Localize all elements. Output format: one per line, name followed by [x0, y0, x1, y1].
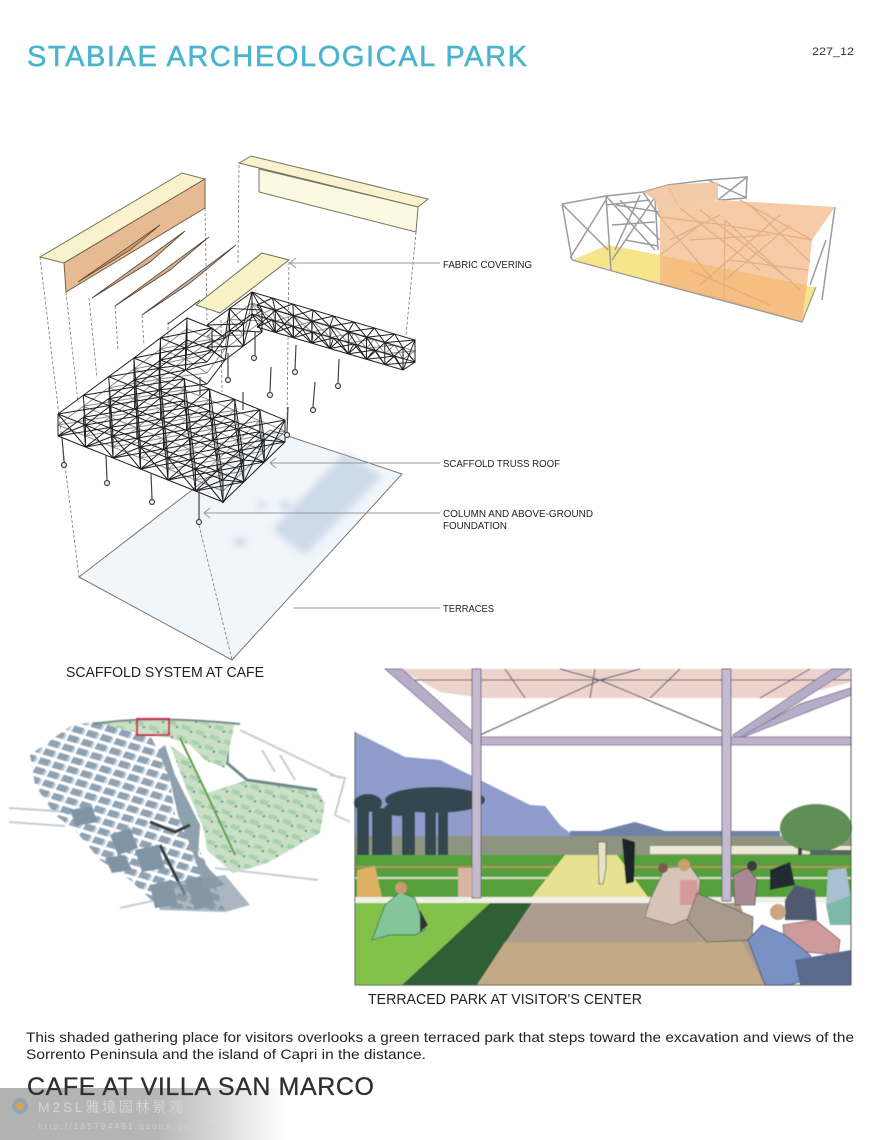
- people on bench: [645, 859, 700, 925]
- seated cafe group: [733, 861, 851, 985]
- label: column and foundation: COLUMN AND ABOVE-GROUND: [443, 509, 593, 520]
- park teal edge and tree row: [227, 725, 317, 790]
- fabric panel: center: [196, 253, 289, 313]
- sketch: terraced park at visitor's center: [354, 669, 852, 985]
- site model of city and park: [9, 719, 350, 912]
- horizontal beam: [473, 737, 851, 745]
- standing people: [598, 838, 635, 884]
- distant water and hills: [570, 822, 780, 838]
- label: column and foundation: [443, 509, 593, 532]
- watermark url: http://185794491.qzone.qq.com: [38, 1121, 215, 1131]
- fabric panel: left: [40, 173, 236, 324]
- floor edge: [572, 260, 816, 322]
- roof thin lines: [415, 669, 851, 735]
- mountain: [355, 732, 570, 845]
- columns and foundations: [62, 332, 340, 524]
- dark central feature: [150, 822, 190, 895]
- concrete floor: [477, 903, 765, 985]
- central yellow path: [532, 855, 648, 897]
- watermark icon: [12, 1098, 28, 1114]
- watermark name: M2SL雅境园林景观: [38, 1099, 183, 1115]
- foreground white ledge: [355, 897, 851, 903]
- 3D massing view of fabric on truss: [562, 177, 835, 322]
- body text: [26, 1029, 854, 1062]
- label: scaffold truss roof: SCAFFOLD TRUSS ROOF: [443, 459, 560, 470]
- body text: Sorrento Peninsula and the island of Capri in the distance.: [26, 1046, 426, 1062]
- horizon band: [355, 836, 851, 857]
- label: column and foundation: FOUNDATION: [443, 521, 507, 532]
- red location marker: [137, 719, 169, 735]
- left column: [472, 669, 481, 898]
- top dark edge: [93, 720, 240, 724]
- fabric panel: right: [239, 156, 428, 232]
- coastal roads: [9, 730, 350, 908]
- label: fabric covering: FABRIC COVERING: [443, 260, 532, 271]
- darker lower city blocks: [70, 806, 215, 910]
- shoreline water band: [158, 745, 225, 890]
- dashed projection lines: [40, 165, 416, 660]
- lawn shadow: [402, 903, 532, 985]
- sketch frame: [355, 669, 851, 985]
- title: STABIAE ARCHEOLOGICAL PARK: [27, 41, 528, 73]
- yellow floor: [572, 245, 816, 322]
- top orange fabric: [643, 182, 718, 217]
- park fields: [170, 745, 325, 873]
- right column: [722, 669, 731, 901]
- terrace ground plate: [79, 430, 402, 660]
- caption: terraced park: TERRACED PARK AT VISITOR'S CENTER: [368, 991, 642, 1008]
- foreground lawn: [355, 903, 490, 985]
- gray truss frame: [562, 177, 835, 300]
- seated woman and group at left: [357, 866, 472, 897]
- body text: This shaded gathering place for visitors overlooks a green terraced park that steps toward the excavation and views of the: [26, 1029, 854, 1045]
- watermark band: [0, 1088, 285, 1140]
- orange upper face: [660, 200, 835, 285]
- project heading: CAFE AT VILLA SAN MARCO: [27, 1073, 374, 1101]
- scaffold truss roof: [58, 292, 415, 503]
- stone bench: [687, 893, 753, 942]
- caption: scaffold system: SCAFFOLD SYSTEM AT CAFE: [66, 664, 264, 681]
- terrace lawns: [355, 855, 851, 898]
- man seated on lawn: [372, 882, 428, 940]
- right tree: [780, 804, 852, 858]
- page number: 227_12: [812, 46, 854, 58]
- city blocks: [30, 722, 225, 910]
- left tree grove: [354, 787, 485, 856]
- exploded axonometric diagram: scaffold system: [40, 156, 593, 660]
- upper terrace band: [95, 720, 235, 768]
- label: terraces: TERRACES: [443, 604, 494, 615]
- orange lower face: [660, 255, 807, 322]
- lower road blocks: [150, 875, 250, 912]
- green axis: [180, 738, 235, 855]
- lavender braces: [385, 669, 851, 746]
- leader lines: [204, 258, 440, 608]
- roof fabric: [400, 669, 851, 698]
- fabric truss lines: [660, 200, 812, 322]
